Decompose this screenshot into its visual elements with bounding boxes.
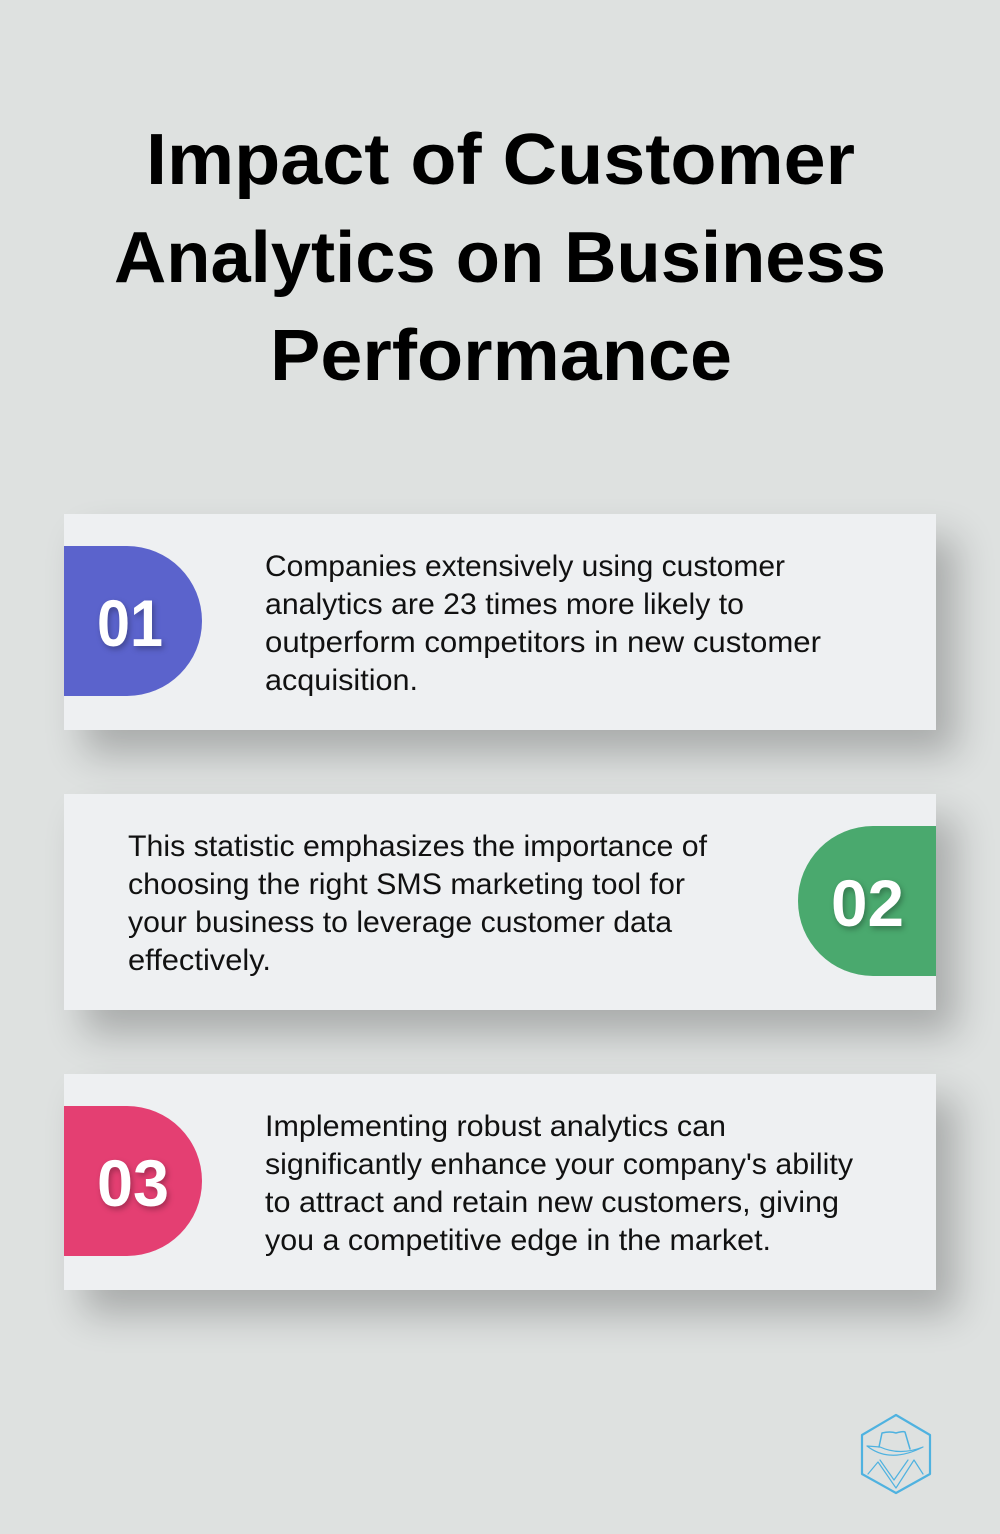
title <box>114 120 886 396</box>
panel: card 3 <box>64 1074 936 1290</box>
title: Analytics on Business <box>114 218 886 298</box>
badge 02 <box>798 826 936 976</box>
text block: card 3: to attract and retain new customers, giving <box>265 1186 839 1219</box>
number 01: 01 <box>97 586 163 660</box>
text block: card 2 <box>128 830 708 977</box>
text block: card 3: Implementing robust analytics can <box>265 1110 726 1143</box>
text block: card 2: effectively. <box>128 944 271 977</box>
text block: card 3: you a competitive edge in the market. <box>265 1224 771 1257</box>
title: Impact of Customer <box>146 120 855 200</box>
number 03: 03 <box>97 1146 169 1220</box>
text block: card 1: Companies extensively using customer <box>265 550 785 583</box>
panel: card 2 <box>64 794 936 1010</box>
text block: card 2: choosing the right SMS marketing tool for <box>128 868 685 901</box>
text block: card 1: outperform competitors in new customer <box>265 626 821 659</box>
text block: card 2: This statistic emphasizes the importance of <box>128 830 708 863</box>
text block: card 1 <box>265 550 821 697</box>
number 02: 02 <box>831 866 904 940</box>
title: Performance <box>270 316 732 396</box>
text block: card 3: significantly enhance your company's ability <box>265 1148 853 1181</box>
text block: card 3 <box>265 1110 853 1257</box>
panel: card 1 <box>64 514 936 730</box>
text block: card 1: analytics are 23 times more likely to <box>265 588 744 621</box>
icon: logo hexagon with hat <box>862 1415 930 1493</box>
text block: card 1: acquisition. <box>265 664 418 697</box>
text block: card 2: your business to leverage customer data <box>128 906 672 939</box>
badge 01 <box>64 546 202 696</box>
badge 03 <box>64 1106 202 1256</box>
